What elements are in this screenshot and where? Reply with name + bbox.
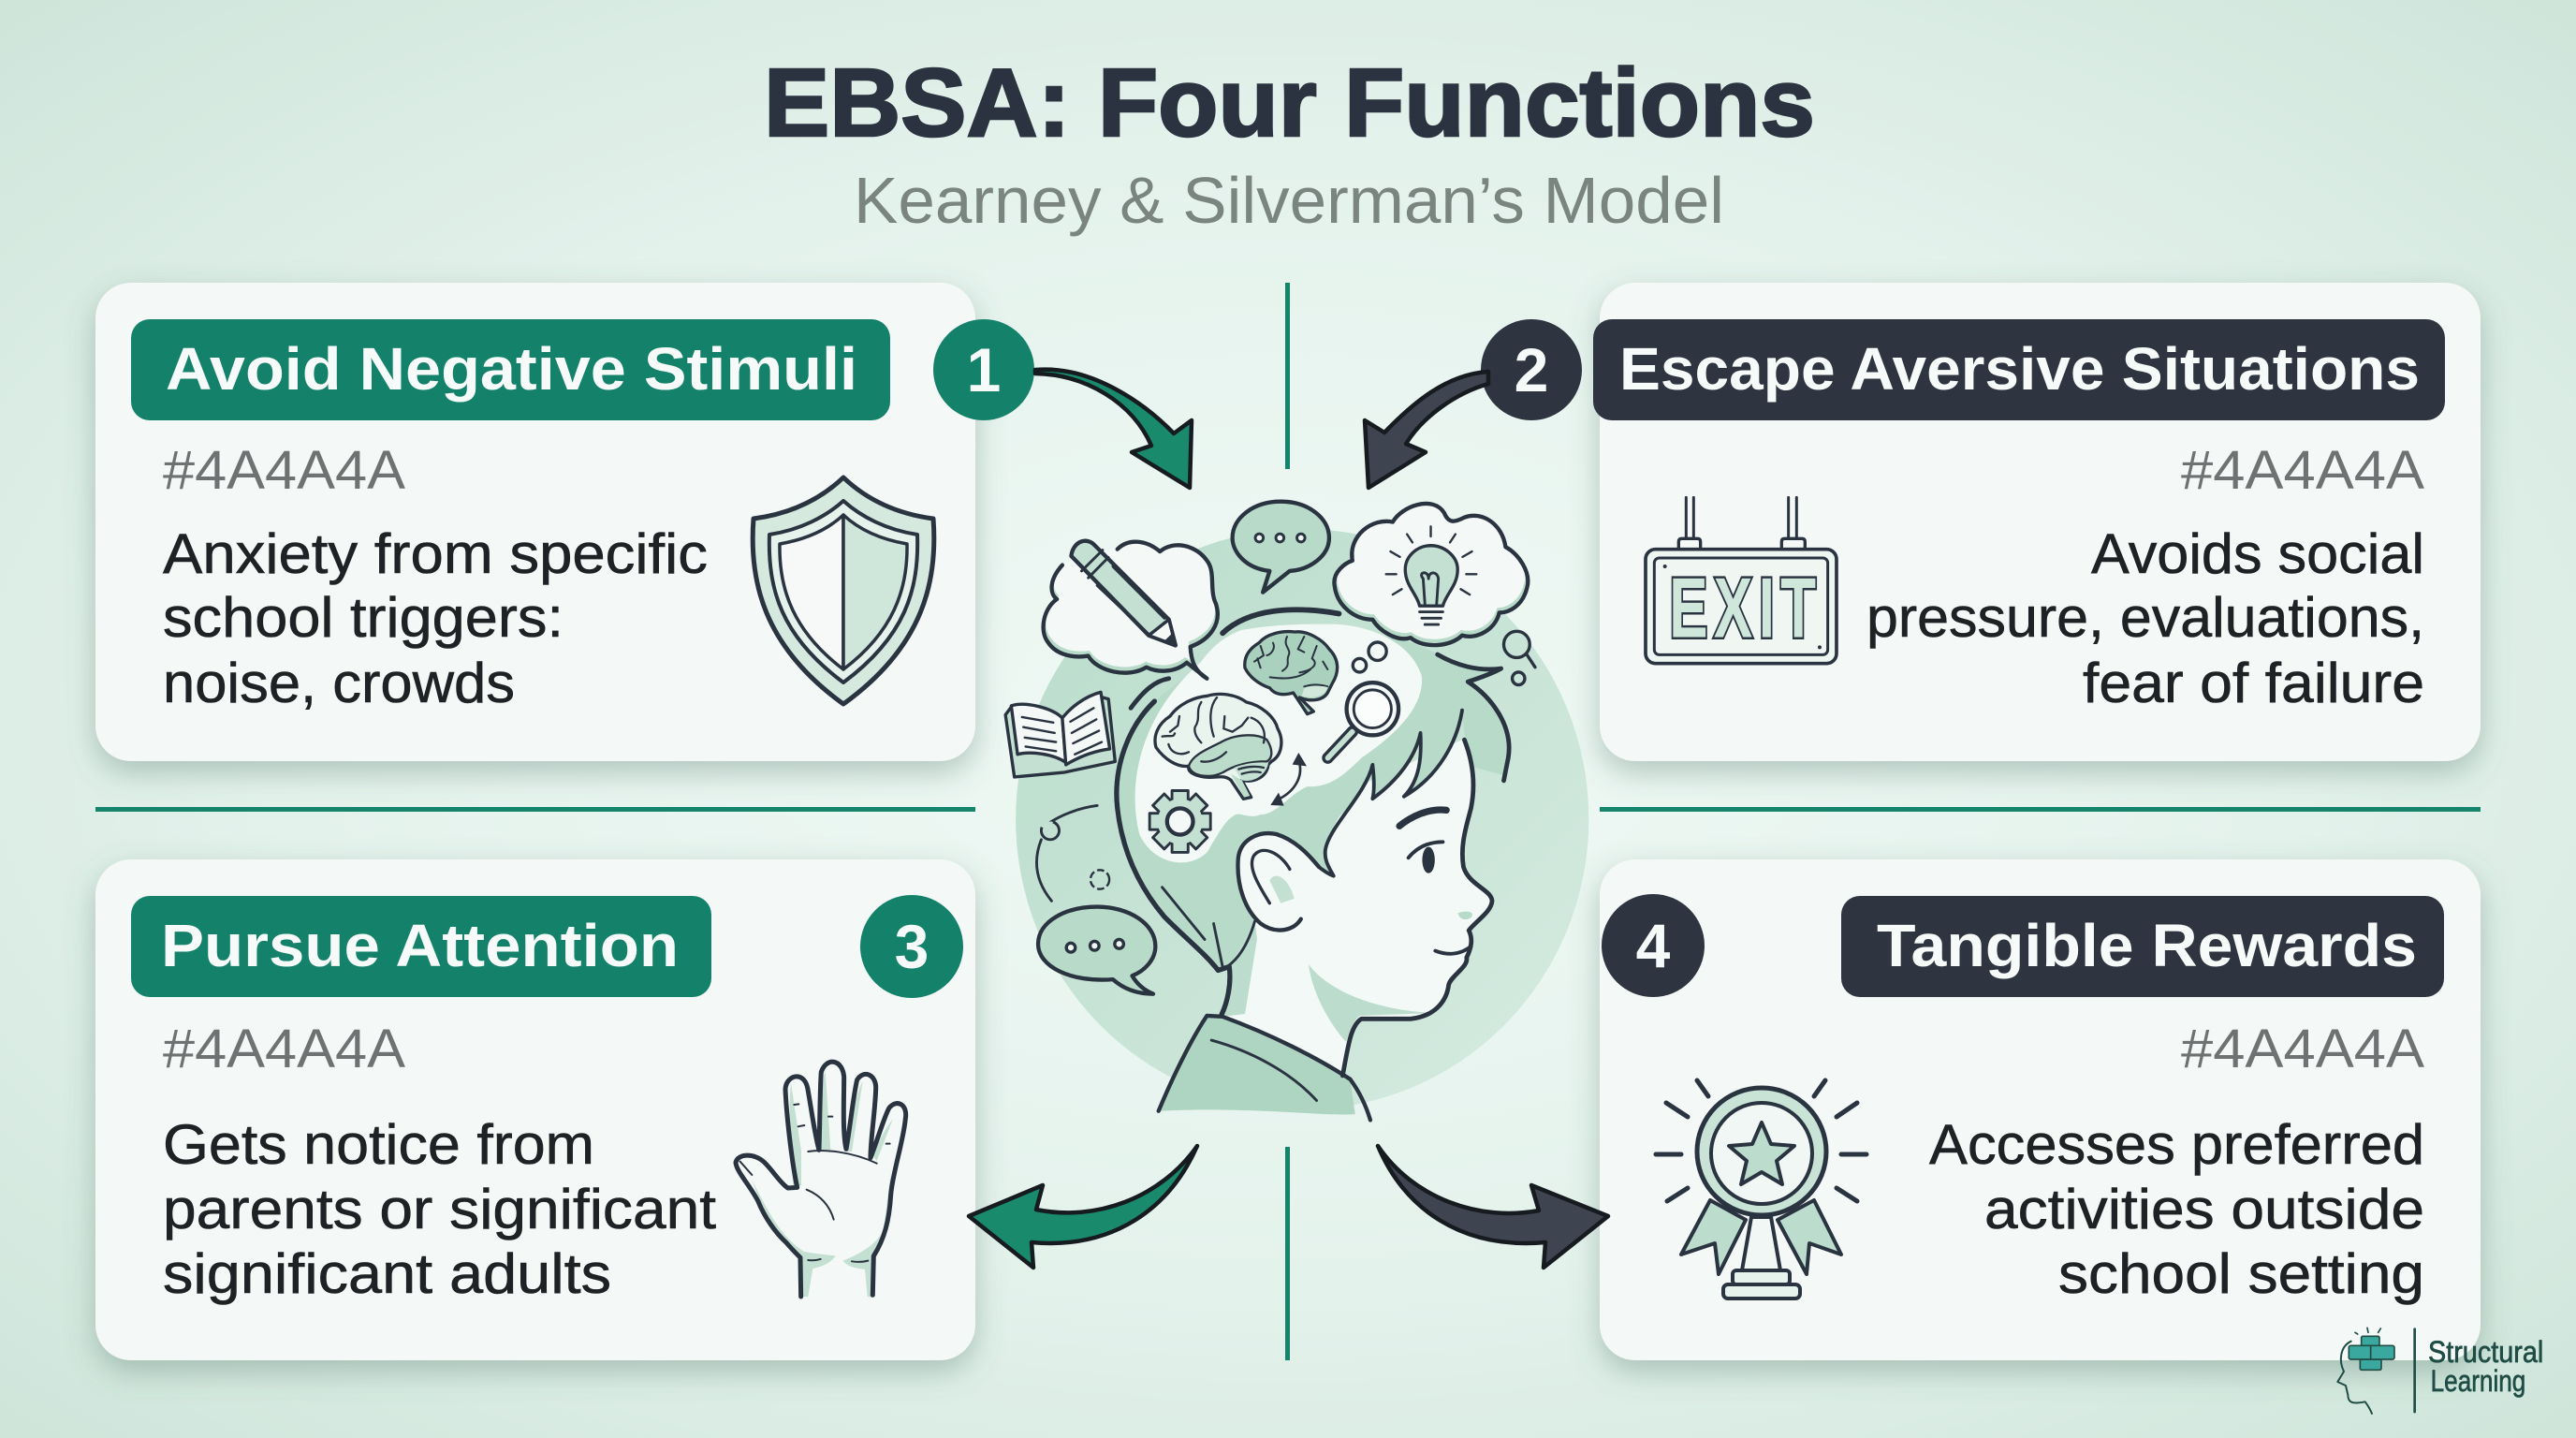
- description: Anxiety from specific: [163, 522, 708, 585]
- gear: [1149, 790, 1210, 852]
- colour code text: #4A4A4A: [2181, 1019, 2424, 1079]
- shirt: [1159, 1016, 1370, 1120]
- double arrow: [1270, 753, 1307, 806]
- arrow: centre to panel 4: [1378, 1146, 1608, 1268]
- icon: exit sign: [1646, 497, 1837, 664]
- description: [163, 1113, 716, 1305]
- icon: raised hand: [736, 1062, 906, 1297]
- heading badge 2: Escape Aversive Situations: [1619, 335, 2420, 403]
- description: [1866, 522, 2424, 714]
- arrow: badge 1 to centre: [1035, 370, 1192, 488]
- open book: [1005, 692, 1115, 777]
- top speech bubble: [1233, 502, 1329, 593]
- description: activities outside: [1984, 1178, 2424, 1240]
- logo wordmark: [2428, 1335, 2543, 1398]
- panel: pursue attention: [95, 859, 975, 1360]
- description: [1929, 1113, 2424, 1305]
- nape shadow: [1222, 921, 1257, 1017]
- description: Gets notice from: [163, 1113, 594, 1176]
- description: significant adults: [163, 1242, 611, 1305]
- logo: structural learning: [2337, 1328, 2543, 1414]
- logo wordmark: Learning: [2431, 1364, 2525, 1398]
- thought cloud with pencil: [1044, 540, 1218, 679]
- logo mark: [2337, 1328, 2394, 1414]
- bottom speech bubble: [1038, 907, 1155, 994]
- colour code text: #4A4A4A: [163, 1019, 405, 1079]
- description: school setting: [2058, 1242, 2424, 1305]
- colour code text: #4A4A4A: [163, 440, 405, 501]
- thought cloud with light bulb: [1334, 502, 1528, 645]
- number 1: 1: [967, 335, 1001, 404]
- number 3: 3: [895, 912, 929, 981]
- description: [163, 522, 708, 714]
- description: pressure, evaluations,: [1866, 586, 2424, 649]
- logo wordmark: Structural: [2428, 1335, 2543, 1369]
- panel: tangible rewards: [1600, 859, 2481, 1360]
- description: Accesses preferred: [1929, 1113, 2424, 1176]
- colour code text: #4A4A4A: [2181, 440, 2424, 501]
- number 4: 4: [1636, 911, 1671, 980]
- heading badge 1: [131, 319, 890, 420]
- logo divider: [2413, 1328, 2416, 1413]
- panel: escape aversive situations: [1481, 283, 2481, 761]
- description: fear of failure: [2083, 652, 2424, 714]
- number 2: 2: [1515, 335, 1548, 404]
- number 3: [860, 895, 963, 998]
- icon: shield: [753, 477, 934, 704]
- arrow: badge 2 to centre: [1365, 372, 1488, 488]
- mint disc: [1016, 529, 1588, 1109]
- face and neck fill: [1222, 740, 1492, 1076]
- white thought space: [1135, 624, 1422, 862]
- number 1: [933, 319, 1034, 420]
- description: Avoids social: [2091, 522, 2424, 585]
- ear: [1237, 833, 1319, 931]
- brains and double arrow inside the head: [1155, 632, 1338, 806]
- heading badge 4: [1841, 896, 2444, 997]
- number 2: [1481, 319, 1582, 420]
- arrow: centre to panel 3: [969, 1146, 1197, 1268]
- panel: avoid negative stimuli: [95, 283, 1034, 761]
- dashed motion arcs: [1036, 805, 1109, 901]
- description: school triggers:: [163, 586, 564, 649]
- small brain: [1245, 632, 1338, 714]
- central illustration: child profile with thoughts: [1005, 502, 1588, 1120]
- icon: medal: [1656, 1080, 1866, 1299]
- subtitle: Kearney & Silverman’s Model: [854, 164, 1724, 237]
- head outlines: [1117, 609, 1509, 1076]
- neck shadow: [1309, 964, 1435, 1042]
- title: EBSA: Four Functions: [764, 49, 1815, 156]
- magnifying glass: [1328, 682, 1398, 758]
- heading badge 3: Pursue Attention: [161, 912, 679, 979]
- large brain: [1155, 694, 1281, 799]
- eye, brow, nose and mouth: [1399, 810, 1472, 954]
- description: noise, crowds: [163, 652, 515, 714]
- icon: exit sign: EXIT: [1669, 562, 1816, 656]
- dividers: [95, 283, 2481, 1360]
- heading badge 4: Tangible Rewards: [1877, 912, 2417, 979]
- description: parents or significant: [163, 1178, 716, 1240]
- number 4: [1602, 894, 1705, 997]
- heading badge 3: [131, 896, 711, 997]
- heading badge 1: Avoid Negative Stimuli: [166, 335, 857, 403]
- hair: [1117, 633, 1508, 970]
- heading badge 2: [1593, 319, 2445, 420]
- thought dots: [1353, 631, 1535, 685]
